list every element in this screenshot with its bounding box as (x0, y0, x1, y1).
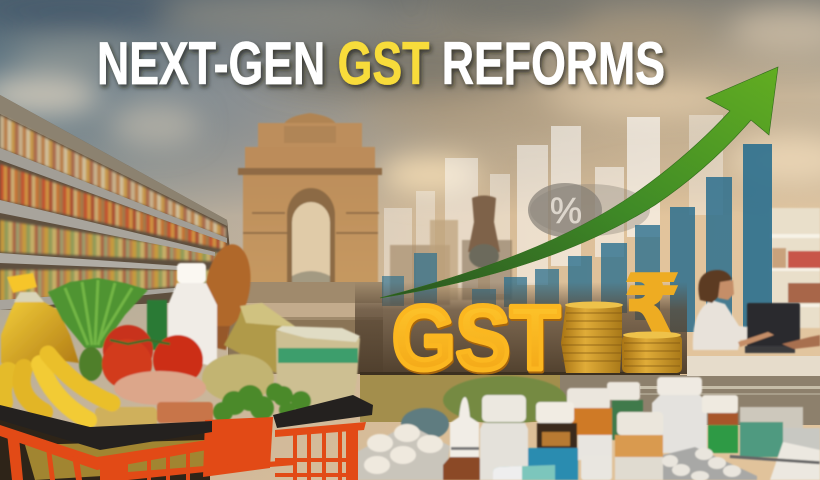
basket interior (0, 415, 210, 480)
GST 3D lettering: GST (392, 288, 560, 389)
grocery basket (0, 241, 373, 480)
grain can (276, 331, 360, 408)
dropper bottle (450, 397, 479, 457)
scissors (730, 455, 820, 464)
GST 3D lettering: GST (393, 290, 561, 391)
dark wall behind GST (355, 282, 687, 374)
blister pack left (357, 424, 450, 480)
translucent white bars (384, 115, 723, 298)
India Gate monument (238, 113, 382, 300)
rupee symbol: ₹ (623, 258, 681, 353)
small white jar (581, 456, 612, 480)
basket orange body (0, 417, 366, 480)
broccoli (213, 383, 311, 422)
tomatoes (103, 325, 153, 375)
grain mound (202, 354, 274, 402)
paper (770, 442, 820, 480)
boxes (740, 407, 803, 428)
green growth arrow (380, 67, 778, 298)
white bottle (482, 395, 526, 422)
shrub behind medicines (443, 376, 567, 424)
counter and lower ground (360, 356, 820, 425)
orange bottle back (567, 388, 610, 410)
basket black rim (0, 395, 373, 450)
teal tube (493, 465, 555, 480)
green bottle (147, 300, 167, 350)
coin stacks (561, 302, 682, 373)
percent badge (528, 183, 650, 237)
items (1, 241, 360, 429)
base wall behind groceries (228, 282, 383, 374)
blister pack right (663, 447, 757, 480)
title: NEXT-GEN GST REFORMS (97, 30, 665, 97)
city skyline silhouette (390, 196, 512, 305)
milk bottle (168, 283, 217, 365)
left supermarket shelves (0, 95, 235, 310)
pharmacist at counter (693, 270, 820, 353)
amber jar (536, 402, 574, 423)
rice pack (224, 303, 296, 373)
bananas (1, 354, 112, 420)
big white bottle (657, 377, 702, 395)
wrapped food (114, 371, 206, 405)
percent badge: % (550, 190, 582, 231)
tin (95, 407, 157, 429)
right pharmacy shelves (770, 208, 820, 328)
cooking oil bottle (1, 273, 79, 367)
green bottle back (607, 382, 640, 400)
medicine group (357, 376, 820, 480)
teal rising bars (382, 144, 772, 334)
green labelled bottle (702, 395, 738, 413)
leafy greens (48, 278, 148, 348)
orange front jar (617, 412, 663, 435)
bread (200, 241, 256, 331)
